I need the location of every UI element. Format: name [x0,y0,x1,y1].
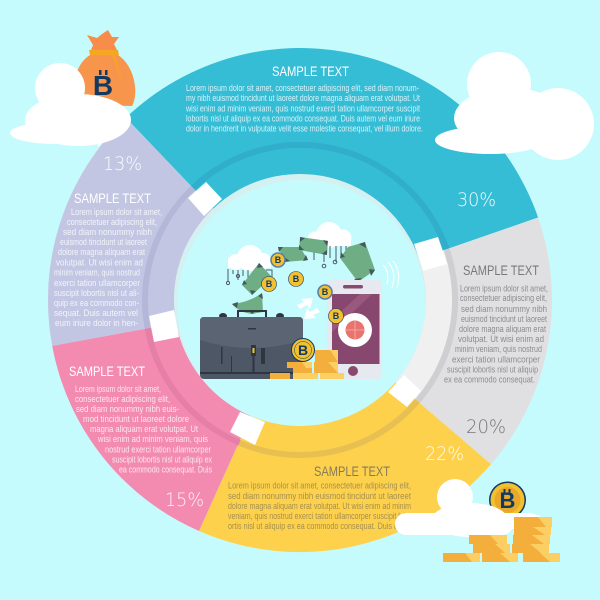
text block: purple: sed diam nonummy nibh [63,227,152,238]
text block: yellow: ortis nisl ut aliquip ex ea commodo consequat. Duis a [228,521,399,532]
percentage: 15%: 15% [165,489,204,511]
illustration: central finance scene [200,222,399,379]
icon: transfer arrows [297,298,320,319]
text block: yellow [228,480,411,532]
icon: large bitcoin coin [489,482,526,518]
text block: gray: euismod tincidunt ut laoreet [461,314,547,325]
heading: purple: SAMPLE TEXT [74,190,151,206]
text block: purple: eum iriure dolor in hen- [55,318,138,329]
text block: pink [75,384,212,476]
heading: pink: SAMPLE TEXT [69,363,145,379]
heading: gray: SAMPLE TEXT [463,262,539,278]
icon: coin stacks bottom right [443,517,560,562]
text block: gray: minim veniam, quis nostrud [455,344,542,355]
icon: bitcoin coins center: B [275,255,282,265]
panel: blue segment 30% [126,48,538,259]
text block: yellow: dolore magna aliquam erat volutpat. Ut wisi enim ad minim [228,501,411,512]
text block: purple: Lorem ipsum dolor sit amet, [71,207,162,218]
panel: yellow segment 22% [199,382,491,552]
text block: purple: minim veniam, quis nostrud [54,268,140,278]
icon: bitcoin coins center: B [266,279,273,289]
text block: blue: my nibh euismod tincidunt ut laoreet dolore magna aliquam erat volutpat. Ut [186,93,420,104]
cloud: bottom right [395,479,541,537]
icon: bitcoin coins center: B [293,274,300,284]
icon: money bag [75,30,135,106]
text block: gray: dolore magna aliquam erat [459,324,546,335]
text block: purple: exerci tation ullamcorper [54,278,140,289]
text block: purple: sequat. Duis autem vel [54,308,138,319]
text block: pink: Lorem ipsum dolor sit amet, [75,384,161,395]
text block: gray: sed diam nonummy nibh [461,304,547,315]
text block: yellow: Lorem ipsum dolor sit amet, consectetuer adipiscing elit, [228,480,411,492]
pale inner ring [172,172,428,428]
text block: gray: volutpat. Ut wisi enim ad [458,334,544,345]
icon: wireless signal [383,261,399,288]
text block: purple: volutpat. Ut wisi enim ad [56,258,143,268]
icon: coin stacks center [270,350,344,379]
heading: blue: SAMPLE TEXT [272,63,349,79]
icon: briefcase [200,311,303,379]
text block: yellow: veniam, quis nostrud exerci tation ullamcorper suscipit lob- [228,511,410,522]
panel: gray segment 20% [396,218,552,464]
panel: pink segment 15% [52,323,251,531]
text block: pink: wisi enim ad minim veniam, quis [97,434,208,445]
text block: purple: consectetuer adipiscing elit, [67,217,157,228]
cloud: top left [10,63,131,147]
text block: gray: Lorem ipsum dolor sit amet, [460,284,548,294]
text block: purple: suscipit lobortis nisl ut ali- [54,288,139,299]
text block: pink: nostrud exerci tation ullamcorper [105,444,211,456]
text block: purple [54,207,162,329]
icon: bitcoin coins center: B [333,311,340,321]
percentage: 13%: 13% [103,153,142,175]
text block: pink: suscipit lobortis nisl ut aliquip ex [112,454,212,466]
text block: gray: exerci tation ullamcorper [452,354,540,366]
icon: money bag: B [93,70,113,101]
percentage: 22%: 22% [425,443,464,465]
text block: gray: suscipit lobortis nisl ut aliquip [447,364,538,376]
text block: gray: consectetuer adipiscing elit, [460,293,547,304]
text block: pink: consectetuer adipiscing elit, [75,394,170,405]
cloud: top right [435,52,594,160]
cloud: center right with circuits [308,222,352,268]
text block: pink: ea commodo consequat. Duis [119,464,212,476]
icon: bitcoin coins center: B [298,342,308,358]
icon: bitcoin coins center [262,253,344,362]
text block: purple: dolore magna aliquam erat [58,247,145,258]
text block: blue: dolor in hendrerit in vulputate velit esse molestie consequat, vel illum dolore. [186,124,423,134]
inner circle [178,180,426,428]
text block: blue: Lorem ipsum dolor sit amet, consectetuer adipiscing elit, sed diam nonum- [186,83,419,94]
icon: green banknotes [232,237,375,314]
text block: purple: euismod tincidunt ut laoreet [60,237,147,248]
text block: purple: quip ex ea commodo con- [54,298,139,309]
percentage: 30%: 30% [457,189,496,211]
panel: purple segment 13% [48,118,213,346]
heading: yellow: SAMPLE TEXT [314,463,390,479]
text block: gray [444,284,548,386]
text block: blue [185,83,423,134]
text block: blue: lobortis nisl ut aliquip ex ea commodo consequat. Duis autem vel eum iriure [186,114,420,124]
percentage: 20%: 20% [466,416,506,438]
icon: large bitcoin coin: B [500,488,515,513]
text block: yellow: sed diam nonummy nibh euismod tincidunt ut laoreet [228,491,411,502]
text block: blue: wisi enim ad minim veniam, quis nostrud exerci tation ullamcorper suscipit [185,104,420,114]
icon: smartphone [327,280,382,379]
text block: gray: ex ea commodo consequat. [444,374,535,386]
icon: bitcoin coins center: B [322,287,329,297]
cloud: center left with circuits [226,245,272,285]
text block: pink: magna aliquam erat volutpat. Ut [90,424,198,435]
text block: pink: sed diam nonummy nibh euis- [76,404,179,415]
white connector squares [149,182,448,445]
text block: pink: mod tincidunt ut laoreet dolore [83,414,189,425]
